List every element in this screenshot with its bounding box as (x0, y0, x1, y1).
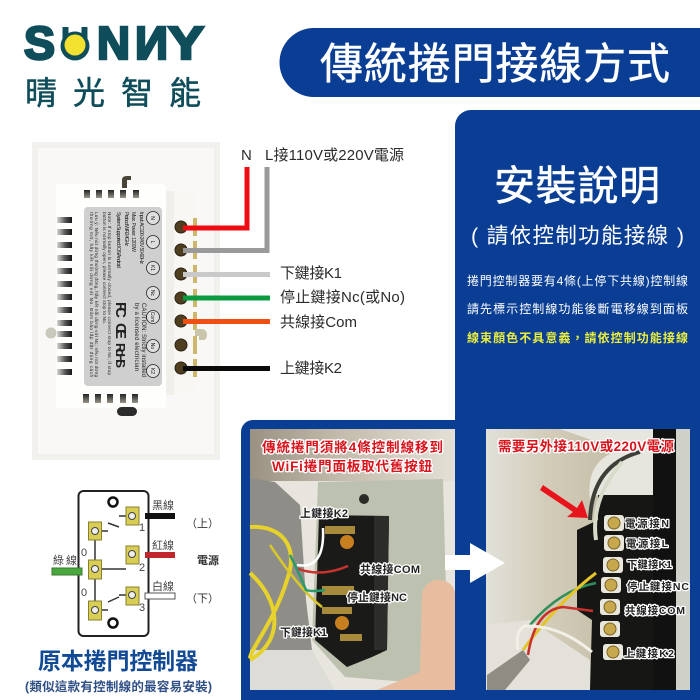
control box diagram: 3 (139, 602, 145, 614)
photo: old control box: WiFi捲門面板取代舊按鈕 (272, 458, 432, 474)
terminal markers (146, 212, 160, 378)
switch back plate: Note: If stop button is normally closed, please connect stop to Nc; if stop (107, 212, 112, 375)
photo: new panel wiring: 停止鍵接NC (627, 580, 689, 593)
control box diagram: 0 (81, 587, 87, 599)
switch back plate: Max. Power: 1200W (130, 212, 136, 252)
wire: N red (183, 167, 247, 228)
switch back plate: No (149, 343, 155, 349)
wire: L grey (183, 167, 267, 250)
logo: SUNNY 晴光智能: Y (168, 17, 204, 69)
panel: installation notes (455, 110, 700, 420)
switch back plate: K1 (149, 265, 155, 271)
control box diagram: 紅線 (152, 538, 174, 552)
switch back plate: Protocol: WiFi 2.4GHz (123, 212, 129, 246)
photo: new panel wiring: 電源接L (626, 537, 669, 550)
wire: K2 black (183, 366, 270, 371)
wire labels (241, 147, 405, 377)
control box diagram: 綠線 (53, 553, 77, 567)
control box diagram: 黑線 (152, 498, 174, 512)
switch back plate: RoHS (113, 343, 128, 368)
logo: SUNNY 晴光智能: 晴光智能 (25, 75, 201, 111)
panel: installation notes: 捲門控制器要有4條(上停下共線)控制線 (467, 273, 688, 288)
control box diagram: 白線 (152, 579, 174, 593)
switch back plate (32, 142, 220, 460)
wire: K1 light grey (183, 272, 270, 277)
screws (175, 218, 207, 377)
switch back plate: N (149, 216, 155, 220)
panel: installation notes: 請先標示控制線功能後斷電移線到面板 (467, 301, 688, 316)
switch back plate: K2 (149, 368, 155, 374)
panel: photos background (241, 420, 700, 700)
control box caption: 原本捲門控制器 (38, 648, 198, 674)
switch back plate: CAUTION: Strictly installed (140, 303, 146, 377)
photo: new panel wiring: 需要另外接110V或220V電源 (498, 438, 674, 454)
control box caption (25, 648, 212, 694)
control box diagram: 0 (81, 547, 87, 559)
panel: installation notes: 安裝說明 (494, 163, 660, 209)
panel: installation notes: ( 請依控制功能接線 ) (471, 224, 684, 248)
control box diagram: 電源 (197, 553, 219, 567)
title banner (280, 28, 700, 97)
switch back plate: FC (112, 302, 129, 318)
wiring diagram (183, 167, 270, 368)
logo: SUNNY 晴光智能: S (24, 17, 55, 69)
wire labels: 共線接Com (280, 314, 357, 331)
wire labels: 下鍵接K1 (280, 265, 342, 282)
control box caption: (類似這款有控制線的最容易安裝) (25, 679, 212, 694)
logo: SUNNY 晴光智能: U (60, 17, 90, 69)
photo: new panel wiring: 下鍵接K1 (627, 558, 672, 571)
logo: SUNNY 晴光智能 (24, 17, 204, 111)
switch back plate: button is normally open, please connect stop to No. (102, 212, 107, 324)
photo: new panel wiring (486, 429, 690, 690)
switch back plate: by a licensed electrician (133, 303, 139, 371)
photo: new panel wiring: 電源接N (625, 517, 669, 530)
logo: SUNNY 晴光智能: N (97, 17, 130, 69)
switch back plate: L (149, 241, 155, 244)
switch back plate: System Supported: IOS/Android (115, 212, 121, 268)
title banner: 傳統捲門接線方式 (320, 41, 670, 89)
arrow: old to new (445, 543, 505, 583)
photo: old control box (250, 429, 455, 690)
photo: old control box: 下鍵接K1 (280, 625, 327, 639)
switch back plate: CE (112, 323, 129, 339)
panel: installation notes: 線束顏色不具意義，請依控制功能接線 (467, 330, 688, 345)
photo: new panel wiring: 上鍵接K2 (624, 647, 674, 660)
product label (84, 207, 162, 386)
wire labels: 上鍵接K2 (280, 360, 342, 377)
switch back plate: Lưu ý: Nếu nút dừng thường đóng, hãy kết nối dừng với Nc; nếu nút dừng (94, 212, 99, 377)
logo: SUNNY 晴光智能: N (135, 17, 168, 69)
switch back plate: Com (149, 312, 155, 322)
photo: old control box: 停止鍵接NC (347, 590, 407, 604)
photo: old control box: 上鍵接K2 (300, 506, 348, 520)
vents top and bottom (83, 190, 139, 403)
wire labels: N (241, 147, 252, 164)
wire: Nc green (183, 296, 270, 300)
control box diagram (52, 491, 219, 636)
vents left (57, 217, 72, 375)
control box diagram: 1 (139, 522, 145, 534)
control box diagram: （上） (186, 517, 219, 530)
switch back plate: Input: AC100-240V 50-60Hz (138, 212, 144, 264)
wire labels: L接110V或220V電源 (265, 147, 404, 164)
switch back plate: Nc (149, 290, 155, 297)
switch back plate: thường mở, hãy kết nối dừng với No. Đảm bảo lắp đặt đúng cách (89, 212, 95, 377)
wire: Com orange (183, 319, 270, 324)
control box diagram: （下） (186, 592, 219, 605)
photo: new panel wiring: 共線接COM (625, 604, 685, 617)
photo: old control box: 共線接COM (360, 562, 420, 576)
photo: old control box: 傳統捲門須將4條控制線移到 (262, 439, 443, 455)
wire labels: 停止鍵接Nc(或No) (280, 289, 405, 306)
control box diagram: 2 (139, 562, 145, 574)
